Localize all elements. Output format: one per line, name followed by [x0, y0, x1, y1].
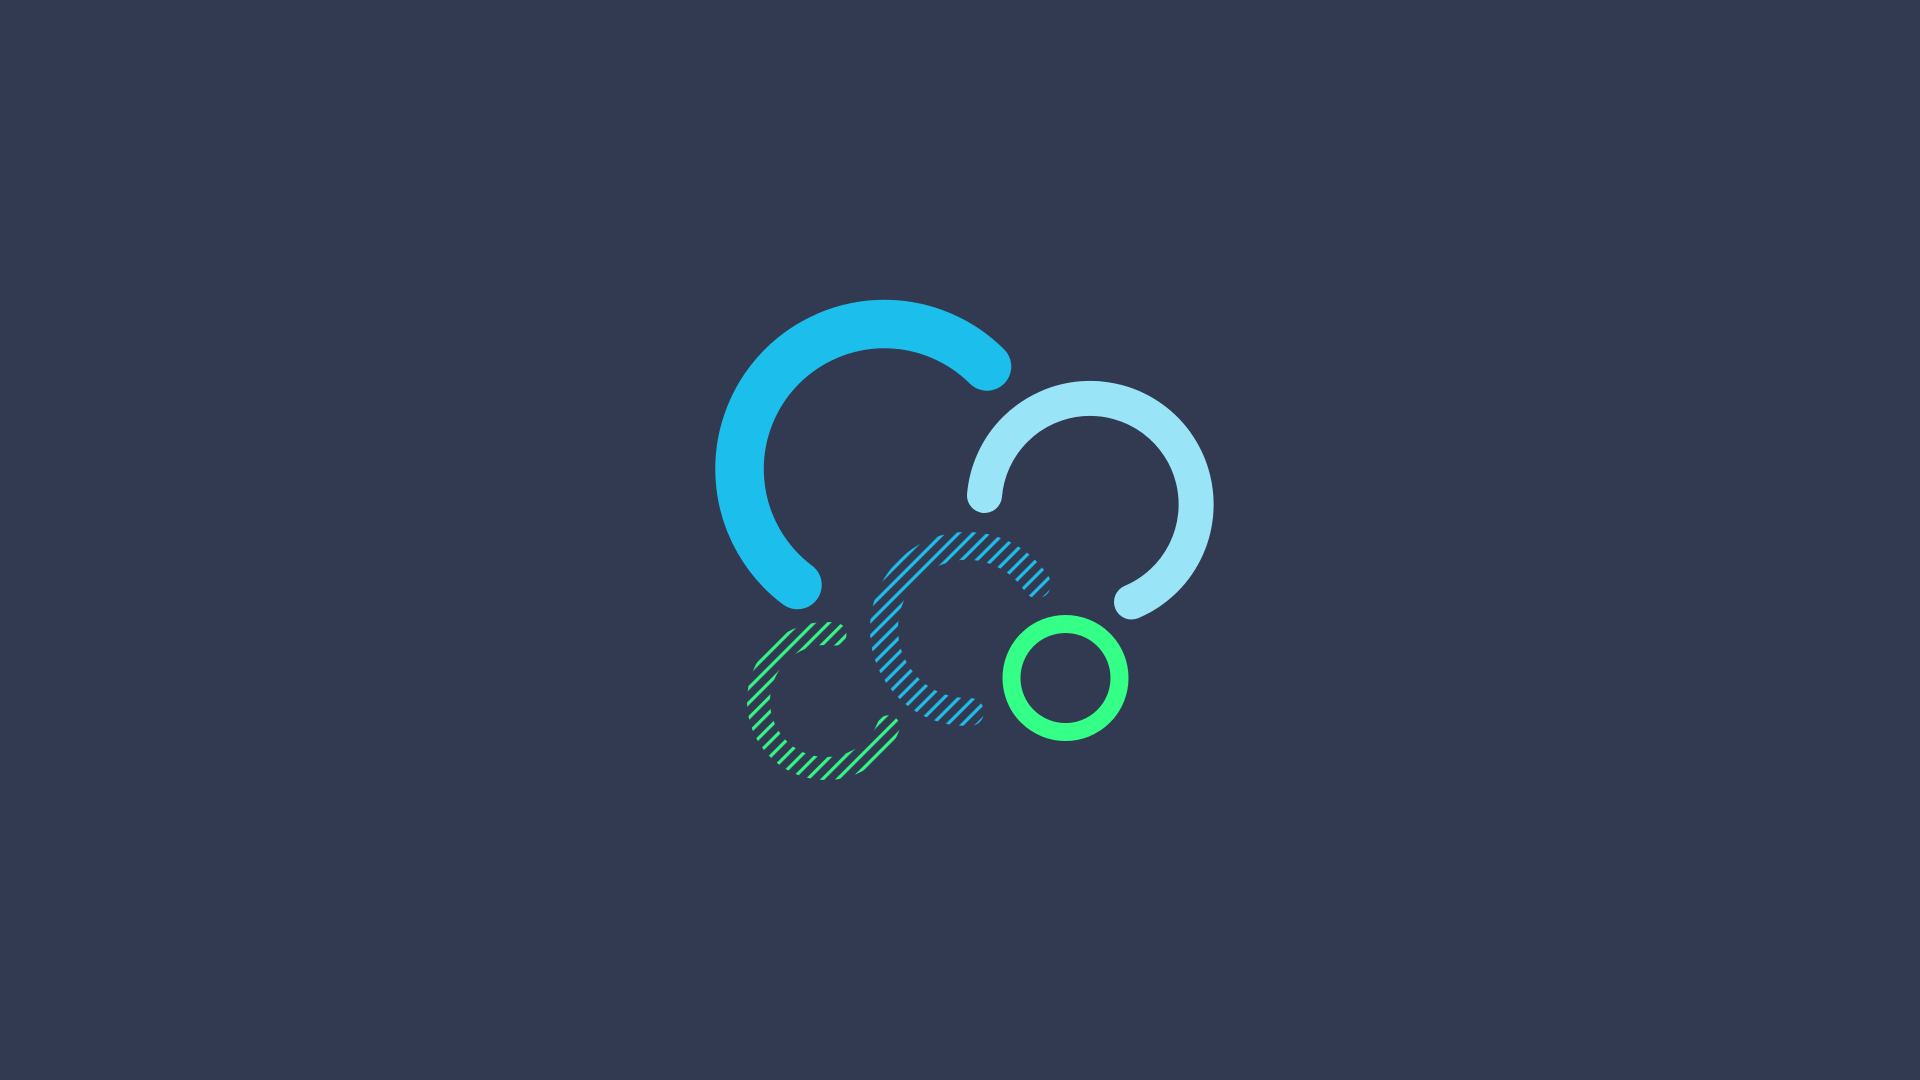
- arc: hatched green: [758, 633, 888, 769]
- arc: light blue: [984, 398, 1196, 602]
- arc: large solid blue: [740, 324, 987, 585]
- ring: solid green: [1012, 624, 1120, 732]
- arc: hatched blue: [884, 546, 1037, 712]
